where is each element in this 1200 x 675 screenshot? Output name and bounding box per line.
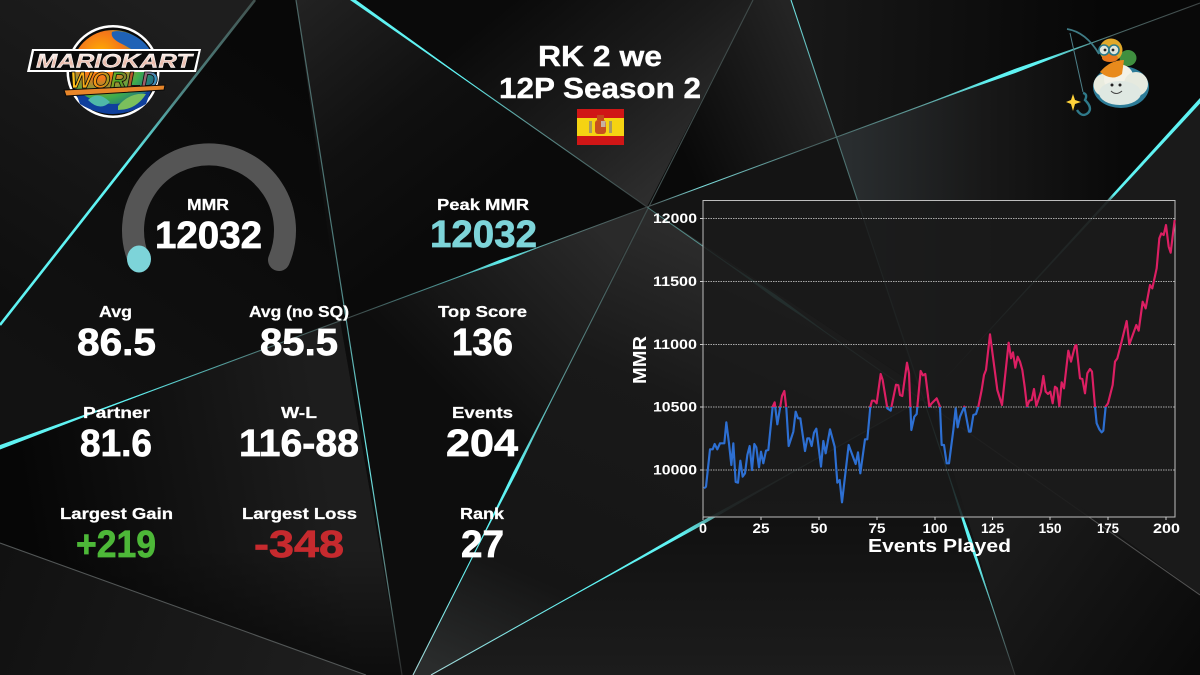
- stat: Peak MMR: 12032: [430, 214, 537, 256]
- gauge: MMR: MMR: [187, 197, 229, 214]
- gauge: MMR: 12032: [155, 215, 262, 257]
- stat: Rank: 27: [461, 524, 504, 566]
- stat: Largest Gain: [60, 506, 173, 566]
- gauge fill marker: [127, 246, 151, 272]
- stat: Avg no SQ: [249, 304, 349, 364]
- y axis tick labels: 12000: [653, 211, 697, 226]
- stat: Avg no SQ: 85.5: [260, 322, 338, 364]
- fishing rod and line: [1067, 29, 1099, 115]
- y axis tick labels: 11000: [653, 337, 697, 352]
- flag: Spain: [577, 109, 624, 145]
- y axis tick labels: [653, 211, 697, 478]
- stat: Peak MMR: Peak MMR: [437, 197, 530, 214]
- stat: Avg: 86.5: [77, 322, 156, 364]
- line chart: MMR over events played: [630, 200, 1180, 556]
- logo underline swoosh: [64, 85, 165, 96]
- logo wordmark bar: [27, 49, 201, 72]
- y axis tick labels: 10000: [653, 462, 697, 478]
- stat: Largest Loss: -348: [254, 524, 344, 566]
- stat: Events: 204: [446, 423, 518, 465]
- x axis tick labels: 150: [1038, 521, 1062, 536]
- x axis tick labels: 0: [699, 521, 707, 536]
- stat: Largest Gain: Largest Gain: [60, 506, 173, 523]
- x axis tick labels: [699, 521, 1180, 536]
- stat: Avg: Avg: [99, 304, 132, 321]
- x axis tick labels: 50: [810, 521, 828, 536]
- logo: Mario Kart World: [27, 25, 201, 118]
- stat: W-L: [239, 405, 359, 465]
- title: RK 2 we: [538, 41, 662, 73]
- gauge track: [133, 154, 285, 260]
- stat: Rank: [460, 506, 504, 566]
- stat: Events: Events: [452, 405, 513, 422]
- series segments above 10500: [772, 220, 1176, 407]
- x axis tick labels: 175: [1097, 521, 1119, 536]
- title: 12P Season 2: [499, 73, 701, 105]
- stat: W-L: W-L: [281, 405, 317, 422]
- x axis tick labels: 100: [922, 521, 948, 536]
- stat: Largest Loss: [242, 506, 357, 566]
- stat: Partner: [80, 405, 152, 465]
- x axis tick labels: 25: [752, 521, 770, 536]
- stat: Largest Gain: +219: [76, 524, 156, 566]
- stat: W-L: 116-88: [239, 423, 359, 465]
- icon: Lakitu fishing on cloud: [1066, 29, 1149, 115]
- gauge: MMR: [127, 154, 285, 272]
- y axis title: MMR: [630, 336, 650, 384]
- stat: Events: [446, 405, 518, 465]
- stat: Rank: Rank: [460, 506, 504, 523]
- logo WORLD text: WORLD: [70, 67, 158, 93]
- y axis tick labels: 10500: [653, 400, 697, 414]
- stat: Top Score: [438, 304, 527, 364]
- stat: Avg: [77, 304, 156, 364]
- x axis title: Events Played: [868, 536, 1011, 556]
- x axis tick labels: 125: [981, 521, 1004, 536]
- plot area: [703, 200, 1175, 517]
- logo wordmark bar: MARIOKART: [36, 52, 194, 72]
- cloud: [1093, 64, 1149, 108]
- x axis tick labels: 200: [1153, 521, 1180, 536]
- stat: Avg no SQ: Avg (no SQ): [249, 304, 349, 321]
- series segments below 10500: [703, 407, 1107, 504]
- Lakitu body: [1099, 38, 1136, 78]
- x axis tick labels: 75: [868, 521, 886, 536]
- stat: Largest Loss: Largest Loss: [242, 506, 357, 523]
- stat: Top Score: Top Score: [438, 304, 527, 321]
- title: [499, 41, 701, 105]
- stat: Top Score: 136: [452, 322, 513, 364]
- stat: Partner: 81.6: [80, 423, 152, 465]
- sparkle star: [1066, 94, 1081, 111]
- logo globe: [66, 25, 160, 118]
- stat: Partner: Partner: [83, 405, 150, 422]
- y axis tick labels: 11500: [653, 274, 697, 289]
